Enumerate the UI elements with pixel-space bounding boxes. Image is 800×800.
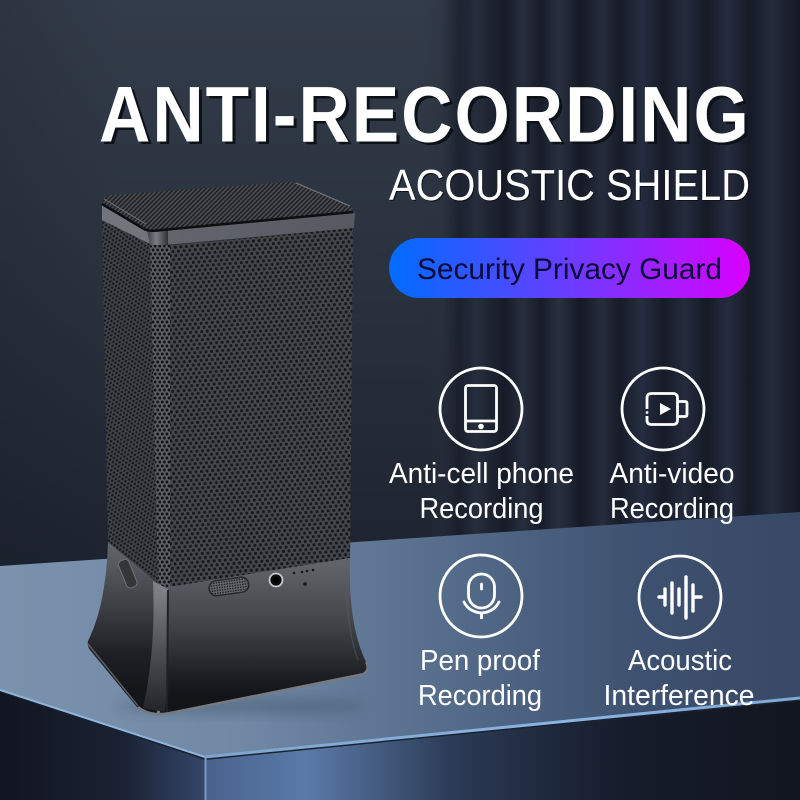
label: Anti-video <box>610 458 734 490</box>
icon: phone <box>440 368 522 450</box>
speaker shadow <box>115 698 365 714</box>
label: Anti-cell phone <box>389 458 574 490</box>
label <box>604 645 754 712</box>
indicator dots <box>293 569 314 586</box>
label: Recording <box>610 493 734 525</box>
mesh corner <box>150 243 170 587</box>
icon: microphone <box>440 555 522 637</box>
feature: pen proof recording <box>418 555 542 712</box>
top grille <box>103 182 352 230</box>
audio jack <box>270 574 282 586</box>
label: Acoustic <box>628 645 732 677</box>
product: anti-recording speaker <box>88 182 367 715</box>
base right face <box>160 558 367 715</box>
feature: acoustic interference <box>604 556 754 712</box>
front speaker slot <box>208 576 250 597</box>
label <box>418 645 542 712</box>
label <box>610 458 734 525</box>
subtitle: ACOUSTIC SHIELD <box>390 162 751 211</box>
table <box>0 512 800 800</box>
mesh left face <box>102 218 163 588</box>
mesh right face <box>163 228 353 588</box>
label: Recording <box>418 680 542 712</box>
icon: video camera <box>622 368 704 450</box>
title: ANTI-RECORDING <box>99 70 749 158</box>
base left face <box>88 542 163 714</box>
tagline pill: Security Privacy Guard <box>417 253 722 286</box>
table left face <box>0 692 205 800</box>
base corner highlight <box>143 581 169 712</box>
icon: sound wave <box>639 556 721 638</box>
label: Recording <box>420 493 544 525</box>
subtitle: ACOUSTIC SHIELD <box>389 161 750 210</box>
top band <box>102 205 152 245</box>
side switch <box>117 558 138 589</box>
tagline pill <box>389 238 750 298</box>
label: Interference <box>604 680 754 712</box>
label <box>389 458 574 525</box>
label: Pen proof <box>420 645 540 677</box>
table right face <box>205 701 800 800</box>
title: ANTI-RECORDING <box>102 73 752 161</box>
table top surface <box>0 512 800 757</box>
feature: anti-cell phone recording <box>389 368 574 525</box>
feature: anti-video recording <box>610 368 734 525</box>
base bottom rim <box>138 674 364 714</box>
base right rim highlight <box>346 560 358 660</box>
